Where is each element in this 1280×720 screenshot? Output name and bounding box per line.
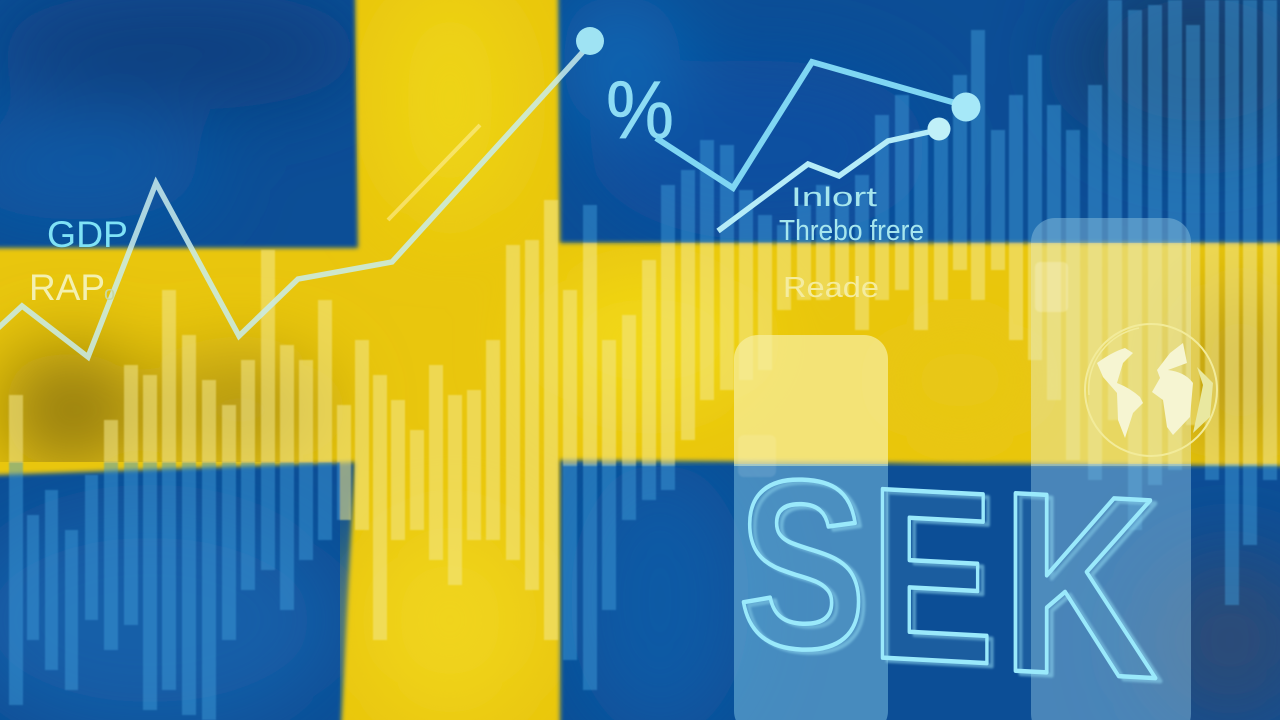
letter S: S bbox=[738, 429, 866, 701]
chart marker: interest rate end bbox=[952, 92, 980, 122]
label: GDP: GDP bbox=[47, 214, 128, 255]
panel: tall glass bar left bbox=[734, 335, 888, 720]
label: RAP: RAP bbox=[29, 267, 105, 308]
faint trend streak bbox=[388, 125, 480, 220]
percent symbol: % bbox=[606, 65, 674, 156]
icon: globe bbox=[1085, 324, 1217, 456]
glow patch bbox=[1035, 262, 1068, 312]
letter E: E bbox=[870, 436, 994, 716]
candles over yellow bbox=[8, 199, 1278, 641]
chart marker: GDP trend end bbox=[576, 27, 604, 55]
label: small o: o bbox=[104, 283, 115, 305]
line chart: interest rate bbox=[656, 62, 966, 188]
glow patch bbox=[738, 435, 776, 477]
label: Inlort: Inlort bbox=[791, 182, 878, 212]
panel: tall glass bar right bbox=[1031, 218, 1191, 720]
continent: Europe and Africa bbox=[1152, 343, 1193, 435]
label: Reade: Reade bbox=[783, 272, 879, 304]
line chart: inflation bbox=[718, 130, 938, 231]
continent: Americas bbox=[1097, 348, 1143, 438]
chart marker: inflation end bbox=[928, 118, 950, 140]
line chart: GDP trend bbox=[0, 44, 590, 357]
title: SEK currency code bbox=[738, 429, 1158, 720]
label: Threbo frere: Threbo frere bbox=[779, 215, 924, 247]
continent: Asia bbox=[1193, 367, 1213, 433]
